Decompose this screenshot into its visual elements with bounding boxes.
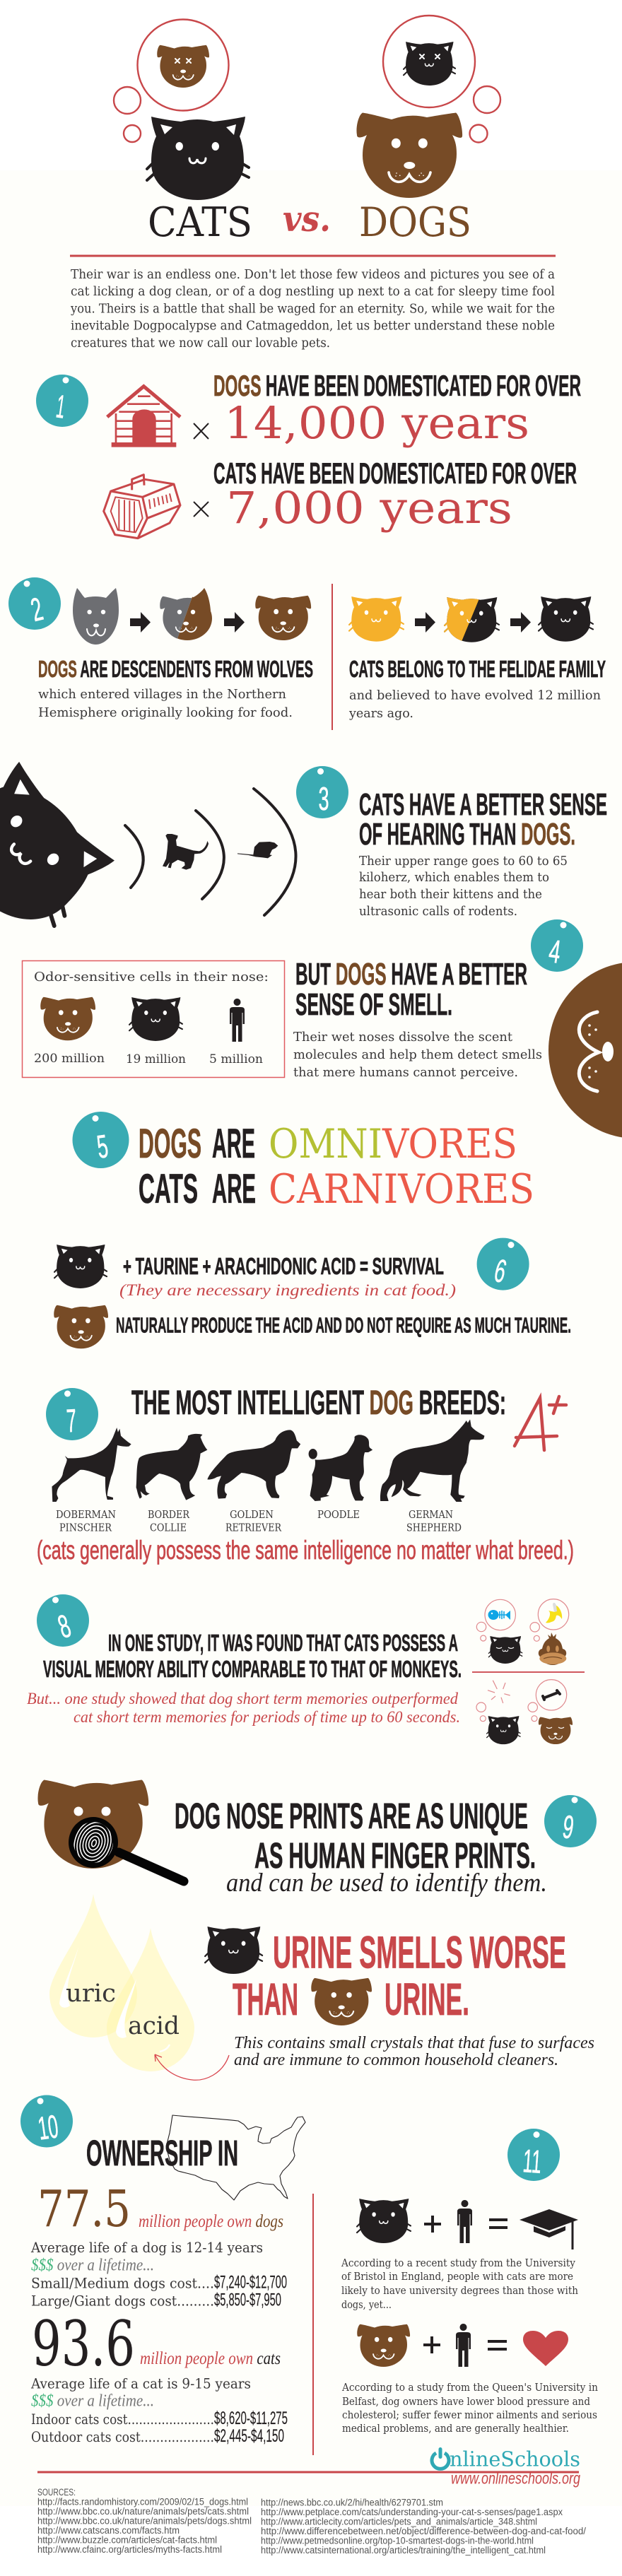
text: cat costs: Average life of a cat is 9-15 years [30, 2375, 251, 2392]
icon: pet carrier [104, 475, 180, 539]
intro text [70, 268, 555, 351]
stat: 93.6 million cat owners: million people own cats [140, 2349, 281, 2368]
text: dog ancestry: which entered villages in the Northern [38, 687, 286, 702]
sound waves [125, 789, 296, 915]
icon: human [230, 999, 245, 1042]
icon: large brown dog [356, 113, 462, 198]
map: United States outline [167, 2115, 305, 2200]
heading: cats hearing [359, 787, 607, 852]
text: Belfast study [341, 2382, 598, 2435]
badge 4 [531, 919, 583, 972]
sources: http://www.differencebetween.net/object/difference-between-dog-and-cat-food/ [261, 2526, 586, 2536]
heading: dog urine: URINE. [385, 1974, 469, 2025]
sources: http://www.bbc.co.uk/nature/animals/pets/cats.shtml [37, 2506, 249, 2517]
title [148, 198, 471, 246]
note: short term memory [27, 1690, 460, 1726]
badge 3: 3 [318, 780, 329, 817]
sources: SOURCES: [37, 2487, 76, 2498]
badge 6 [477, 1238, 529, 1290]
label: uric: uric [66, 1980, 116, 2008]
icon: monkey [539, 1633, 566, 1665]
icon: sleeping dog [539, 1717, 573, 1744]
icon: yellow cat [349, 596, 404, 642]
title: CATS [148, 199, 252, 246]
text: cat costs: $2,445-$4,150 [214, 2426, 284, 2446]
sources: http://www.catsinternational.org/articles/training/the_intelligent_cat.html [261, 2545, 546, 2556]
label: acid: acid [128, 2012, 180, 2040]
text: dog costs: Average life of a dog is 12-14 years [30, 2239, 263, 2256]
text: Belfast study: cholesterol; suffer fewer minor ailments and serious [342, 2410, 597, 2421]
sources: http://www.buzzle.com/articles/cat-facts.html [37, 2534, 217, 2546]
equation: cat plus person equals graduate [357, 2199, 578, 2249]
text: dog costs: $7,240-$12,700 [214, 2273, 287, 2293]
icon: arrow [224, 612, 245, 633]
sources: http://facts.randomhistory.com/2009/02/15_dogs.html [37, 2496, 248, 2507]
text: dog costs: $$$ over a lifetime... [31, 2256, 154, 2274]
text: Bristol study: dogs, yet... [341, 2300, 392, 2311]
note: necessary ingredients: (They are necessary ingredients in cat food.) [119, 1281, 456, 1299]
text: hearing detail: Their upper range goes to 60 to 65 [359, 854, 568, 869]
icon: uric acid drops [49, 1894, 194, 2071]
sources: http://www.articlecity.com/articles/pets_and_animals/article_348.shtml [261, 2516, 537, 2527]
breed labels: COLLIE [150, 1521, 187, 1534]
panel: fact 4 smell [23, 919, 622, 1139]
text: cat costs: Indoor cats cost....................... [31, 2411, 214, 2428]
badge 9: 9 [561, 1808, 576, 1846]
badge 1 [36, 375, 88, 427]
text: Belfast study: According to a study from the Queen's University in [341, 2382, 598, 2394]
text: Belfast study: Belfast, dog owners have lower blood pressure and [342, 2396, 590, 2408]
badge 1: 1 [54, 387, 68, 425]
stat: 7,000 years: 7,000 years [226, 482, 512, 534]
text: cat ancestry: and believed to have evolved 12 million [349, 688, 601, 702]
sources: http://www.petplace.com/cats/understanding-your-cat-s-senses/page1.aspx [261, 2507, 563, 2517]
badge 3 [296, 766, 348, 818]
heading: dogs are omnivores: ARE [212, 1121, 255, 1167]
text: cat costs [30, 2375, 288, 2446]
text: hearing detail: ultrasonic calls of rodents. [359, 904, 517, 919]
breed labels: DOBERMAN [56, 1508, 116, 1521]
badge 2 [8, 577, 61, 630]
icon: golden retriever [207, 1430, 300, 1499]
panel: fact 2 ancestry [8, 577, 606, 730]
icon: sparks [488, 1681, 510, 1703]
breed labels: SHEPHERD [406, 1521, 462, 1534]
icon: doberman [52, 1428, 131, 1502]
badge 10: 10 [36, 2107, 60, 2147]
icon: wolf [73, 588, 119, 645]
icon: poodle [309, 1435, 372, 1501]
intro text: inevitable Dogpocalypse and Catmageddon, let us better understand these noble [71, 319, 555, 334]
badge 6: 6 [491, 1252, 510, 1290]
panel: odor-sensitive cells: Odor-sensitive cells in their nose: [34, 970, 269, 984]
note: short term memory: cat short term memories for periods of time up to 60 seconds. [74, 1708, 460, 1726]
panel: odor-sensitive cells: 200 million [34, 1052, 105, 1066]
breed labels: GERMAN [409, 1508, 453, 1521]
badge 4: 4 [546, 932, 563, 970]
text: dog costs: $5,850-$7,950 [214, 2290, 281, 2310]
icon: small dead dog [157, 45, 209, 88]
icon: arrow [415, 612, 435, 633]
panel: fact 9 nose prints [38, 1780, 597, 1898]
intro text: cat licking a dog clean, or of a dog nestling up next to a cat for sleepy time fool [71, 285, 555, 299]
text: dog ancestry [38, 656, 313, 720]
icon: large black cat [147, 117, 249, 200]
text: cat costs: $8,620-$11,275 [214, 2409, 288, 2428]
panel: fact 11 studies [341, 2129, 598, 2435]
icon: fish bone [488, 1610, 510, 1620]
heading: dogs are omnivores: OMNI [269, 1121, 382, 1168]
heading: dogs are omnivores [139, 1121, 517, 1168]
icon: doghouse [107, 387, 180, 447]
panel: fact 10 ownership [20, 2095, 305, 2446]
text: Bristol study: of Bristol in England, people with cats are more [341, 2271, 573, 2283]
stat: 14,000 years: 14,000 years [224, 397, 529, 449]
logo: OnlineSchools: nlineSchools [450, 2447, 580, 2471]
heading: visual memory [43, 1630, 462, 1682]
text: hearing detail: kiloherz, which enables them to [359, 870, 549, 885]
icon: wolf-dog hybrid [160, 588, 212, 640]
intro text: Their war is an endless one. Don't let those few videos and pictures you see of a [71, 268, 555, 282]
panel: urine [49, 1894, 594, 2080]
thought bubble: dog thinks of cat [383, 16, 500, 143]
text: hearing detail [359, 854, 568, 919]
breed labels: PINSCHER [59, 1521, 112, 1534]
text: cat costs: Outdoor cats cost................... [31, 2428, 214, 2445]
heading: dogs are omnivores: DOGS [139, 1121, 201, 1167]
dog silhouettes [52, 1419, 484, 1502]
panel: odor-sensitive cells: 19 million [126, 1052, 186, 1066]
stat: 77.5 million dog owners [37, 2180, 283, 2238]
badge 8: 8 [54, 1607, 75, 1645]
title: DOGS [359, 199, 471, 246]
badge 10 [20, 2095, 73, 2147]
breed labels: POODLE [317, 1508, 360, 1521]
icon: german shepherd [380, 1419, 484, 1502]
icon group: cat and dog forgetting [476, 1680, 573, 1744]
badge 9 [544, 1795, 597, 1847]
icon: small dead cat [404, 42, 455, 86]
badge 5 [72, 1112, 129, 1168]
heading: cats are carnivores: ARE [212, 1166, 256, 1212]
text: cat costs: $$$ over a lifetime... [31, 2392, 154, 2410]
text: dog ancestry: Hemisphere originally looking for food. [38, 705, 293, 720]
icon: mouse silhouette [237, 842, 278, 858]
panel: fact 1 domestication [36, 369, 581, 539]
icon: big dog muzzle at edge [548, 962, 622, 1139]
icon: cat [54, 1245, 107, 1288]
icon: cat [487, 1716, 520, 1744]
text: smell detail: Their wet noses dissolve the scent [293, 1030, 513, 1045]
equation: dog plus person equals heart [357, 2324, 568, 2367]
icon: multiply sign [194, 502, 209, 517]
text: cat ancestry [348, 656, 606, 721]
panel: fact 6 taurine [54, 1238, 571, 1348]
heading: cats are carnivores: CATS [139, 1166, 198, 1212]
icon: bone [543, 1690, 560, 1700]
intro text: you. Theirs is a battle that shall be waged for an eternity. So, while we wait for the [70, 302, 555, 317]
icon: sleeping cat [488, 1636, 522, 1664]
icon: graduation cap [520, 2209, 578, 2249]
icon group: cat and monkey dreaming [476, 1599, 569, 1665]
sources: http://www.petmedsonline.org/top-10-smartest-dogs-in-the-world.html [261, 2536, 534, 2546]
badge 11 [507, 2129, 560, 2181]
arrow to drop [155, 2054, 229, 2080]
text: hearing detail: hear both their kittens and the [359, 887, 542, 902]
text: Bristol study: likely to have university degrees than those with [341, 2286, 578, 2297]
logo url: www.onlineschools.org [451, 2469, 580, 2488]
icon: yellow-black hybrid cat [445, 597, 499, 642]
stat: 77.5 million dog owners: million people own dogs [139, 2212, 283, 2231]
icon: border collie [136, 1434, 207, 1500]
icon: arrow [130, 612, 151, 633]
text: dog ancestry: DOGS ARE DESCENDENTS FROM WOLVES [38, 656, 313, 682]
text: crystals detail [234, 2034, 594, 2069]
text: Bristol study [341, 2258, 578, 2311]
icon: dog [255, 596, 311, 640]
icon: cat [205, 1927, 262, 1974]
text: smell detail: molecules and help them detect smells [293, 1047, 542, 1062]
panel: fact 8 memory [27, 1594, 585, 1744]
title: vs. [283, 198, 331, 240]
text: dog costs: Large/Giant dogs cost......... [31, 2293, 214, 2310]
heading: ownership in: OWNERSHIP IN [86, 2133, 238, 2173]
breed labels [56, 1508, 462, 1534]
icon: dog with magnifying glass [38, 1780, 184, 1881]
breed labels: GOLDEN [230, 1508, 274, 1521]
icon: black cat [539, 596, 593, 642]
breed labels: RETRIEVER [225, 1521, 282, 1534]
icon: dog silhouette [163, 834, 209, 870]
breed labels: BORDER [148, 1508, 190, 1521]
text: Bristol study: According to a recent study from the University [341, 2258, 576, 2269]
heading: than: THAN [233, 1974, 298, 2025]
header illustration: cat and dog dreaming [114, 16, 500, 200]
icon: cat [129, 997, 182, 1041]
sources [37, 2487, 586, 2556]
panel: odor-sensitive cells: 5 million [209, 1052, 263, 1066]
badge 5: 5 [95, 1127, 110, 1165]
heading: dogs smell [295, 957, 527, 1022]
badge 7 [46, 1388, 98, 1440]
text: dog costs: Small/Medium dogs cost.... [31, 2274, 214, 2291]
icon: dog [40, 997, 95, 1040]
heading: dogs are omnivores: VORES [382, 1121, 517, 1168]
note: identify them: and can be used to identify them. [226, 1869, 547, 1898]
icon: dog [54, 1305, 108, 1348]
heading: intelligent dog breeds: THE MOST INTELLIGENT DOG BREEDS: [131, 1384, 506, 1422]
intro text: creatures that we now call our lovable pets. [71, 336, 330, 351]
note: short term memory: But... one study showed that dog short term memories outperformed [27, 1690, 458, 1707]
stat: 93.6 million cat owners: 93.6 [32, 2307, 135, 2380]
icon: multiply sign [194, 423, 209, 439]
text: crystals detail: and are immune to common household cleaners. [234, 2051, 558, 2069]
badge 11: 11 [522, 2142, 543, 2180]
text: smell detail [293, 1030, 542, 1080]
sources: http://www.catscans.com/facts.htm [37, 2525, 180, 2536]
badge 7: 7 [66, 1402, 77, 1439]
panel: fact 3 hearing [0, 758, 607, 948]
sources: http://www.cfainc.org/articles/myths-facts.html [37, 2544, 222, 2555]
stat: 77.5 million dog owners: 77.5 [37, 2180, 131, 2238]
text: smell detail: that mere humans cannot perceive. [293, 1065, 518, 1080]
icon: A+ grade [515, 1396, 566, 1450]
icon: arrow [510, 612, 531, 633]
heading: dogs smell: SENSE OF SMELL. [295, 987, 452, 1022]
stat: 93.6 million cat owners [32, 2307, 281, 2380]
text: crystals detail: This contains small crystals that that fuse to surfaces [234, 2034, 594, 2052]
icon: dog [311, 1978, 372, 2025]
text: cat ancestry: years ago. [348, 706, 413, 721]
badge 8 [37, 1594, 89, 1647]
heading: cats are carnivores [139, 1166, 534, 1213]
icon: large sideways cat [0, 758, 118, 948]
icon: banana [546, 1603, 562, 1623]
heading: nose prints [175, 1796, 536, 1876]
icon: heart [523, 2331, 568, 2366]
text: dog costs [30, 2239, 287, 2310]
badge 2: 2 [27, 590, 47, 628]
sources: http://www.bbc.co.uk/nature/animals/pets/dogs.shtml [37, 2516, 252, 2526]
sources: http://news.bbc.co.uk/2/hi/health/6279701.stm [261, 2498, 443, 2507]
panel: fact 5 diet [72, 1112, 534, 1213]
text: Belfast study: medical problems, and are generally healthier. [342, 2423, 569, 2435]
thought bubble: cat thinks of dog [114, 20, 229, 142]
heading: cats are carnivores: CARNIVORES [269, 1166, 534, 1213]
panel: fact 7 intelligent breeds [37, 1384, 574, 1565]
panel: odor-sensitive cells [23, 961, 284, 1077]
